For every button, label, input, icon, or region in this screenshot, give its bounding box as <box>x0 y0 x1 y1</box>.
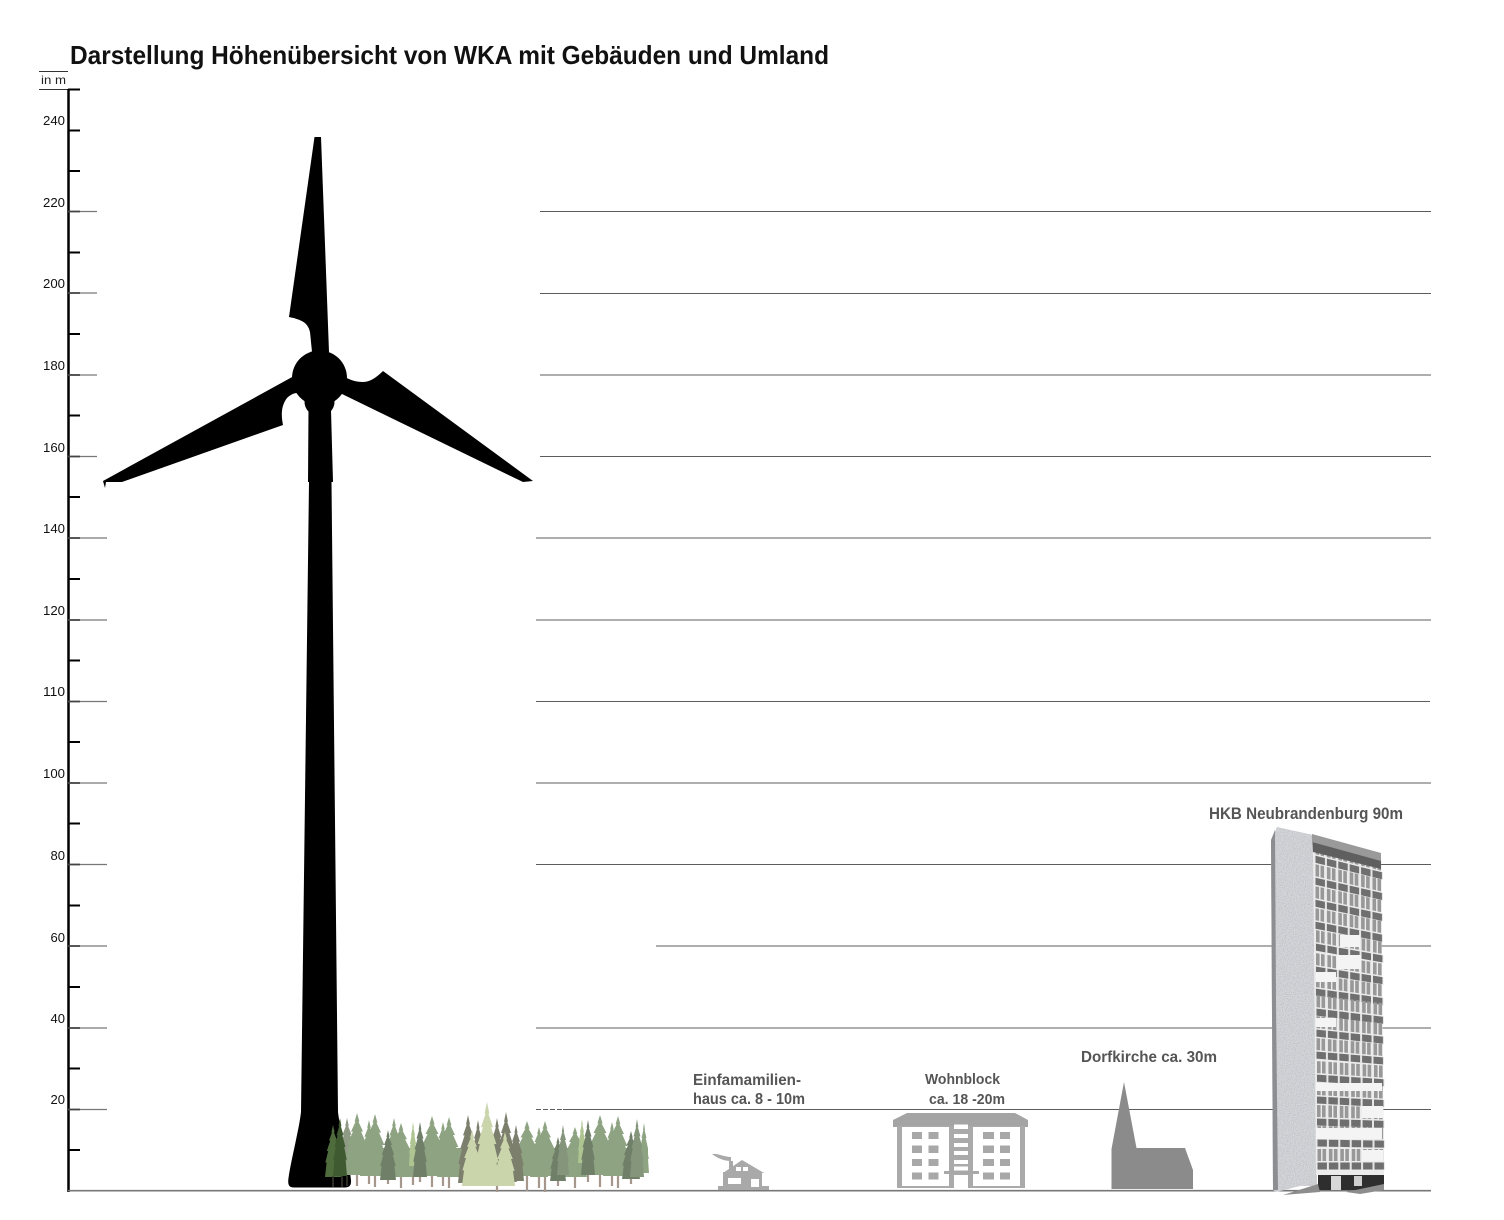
unit label: in m: in m <box>41 73 66 87</box>
axis labels: 160 <box>43 441 65 455</box>
lit window patches <box>1316 935 1383 1161</box>
forest <box>325 1102 649 1192</box>
axis labels: 220 <box>43 196 65 210</box>
axis labels: 100 <box>43 767 65 781</box>
facade <box>1313 840 1384 1175</box>
facade floors <box>1314 842 1385 1170</box>
label: Dorfkirche: Dorfkirche ca. 30m <box>1081 1049 1217 1066</box>
dark green conifers over tower base <box>325 1118 347 1187</box>
axis line and ticks <box>68 89 80 1192</box>
label: Wohnblock: Wohnblock <box>925 1072 1001 1088</box>
icon: village church <box>1112 1082 1193 1189</box>
axis labels: 80 <box>50 849 65 863</box>
icon: apartment block <box>893 1113 1028 1188</box>
grey tick stubs <box>68 212 107 1110</box>
axis labels: 120 <box>43 604 65 618</box>
high-rise HKB Neubrandenburg <box>1271 827 1385 1195</box>
title: Darstellung Höhenübersicht von WKA mit Gebäuden und Umland <box>70 40 829 70</box>
pale conifers, front row <box>462 1102 515 1186</box>
axis labels: 40 <box>50 1012 65 1026</box>
axis labels: 20 <box>50 1093 65 1107</box>
axis labels: 140 <box>43 522 65 536</box>
label: Einfamilienhaus: Einfamamilien- <box>693 1072 801 1089</box>
dark conifers <box>380 1112 644 1184</box>
label: Wohnblock: ca. 18 -20m <box>929 1092 1005 1108</box>
wind turbine silhouette <box>103 137 533 1188</box>
rotor blades and hub <box>289 137 329 352</box>
tree trunks <box>357 1165 631 1192</box>
label: Einfamilienhaus: haus ca. 8 - 10m <box>693 1091 805 1108</box>
axis labels: 60 <box>50 931 65 945</box>
tower <box>288 410 351 1188</box>
horizontal grid lines <box>536 212 1431 1110</box>
roof band <box>1312 835 1381 869</box>
sage conifers, back row <box>338 1113 649 1177</box>
ground line <box>68 1190 1431 1192</box>
icon: house <box>712 1154 769 1190</box>
y axis <box>39 72 107 1192</box>
forest mass behind the trees <box>345 1148 648 1172</box>
axis labels: 110 <box>43 685 65 699</box>
label: Wohnblock <box>925 1072 1005 1108</box>
axis labels: 180 <box>43 359 65 373</box>
unit label: in m <box>39 72 68 90</box>
axis labels: 200 <box>43 277 65 291</box>
label: HKB Neubrandenburg: HKB Neubrandenburg 90m <box>1209 805 1403 823</box>
axis labels: 240 <box>43 114 65 128</box>
axis labels <box>43 114 65 1107</box>
label: Einfamilienhaus <box>693 1072 805 1108</box>
entrance base <box>1283 1175 1384 1195</box>
side wall <box>1271 827 1317 1192</box>
bright conifers <box>409 1119 586 1166</box>
